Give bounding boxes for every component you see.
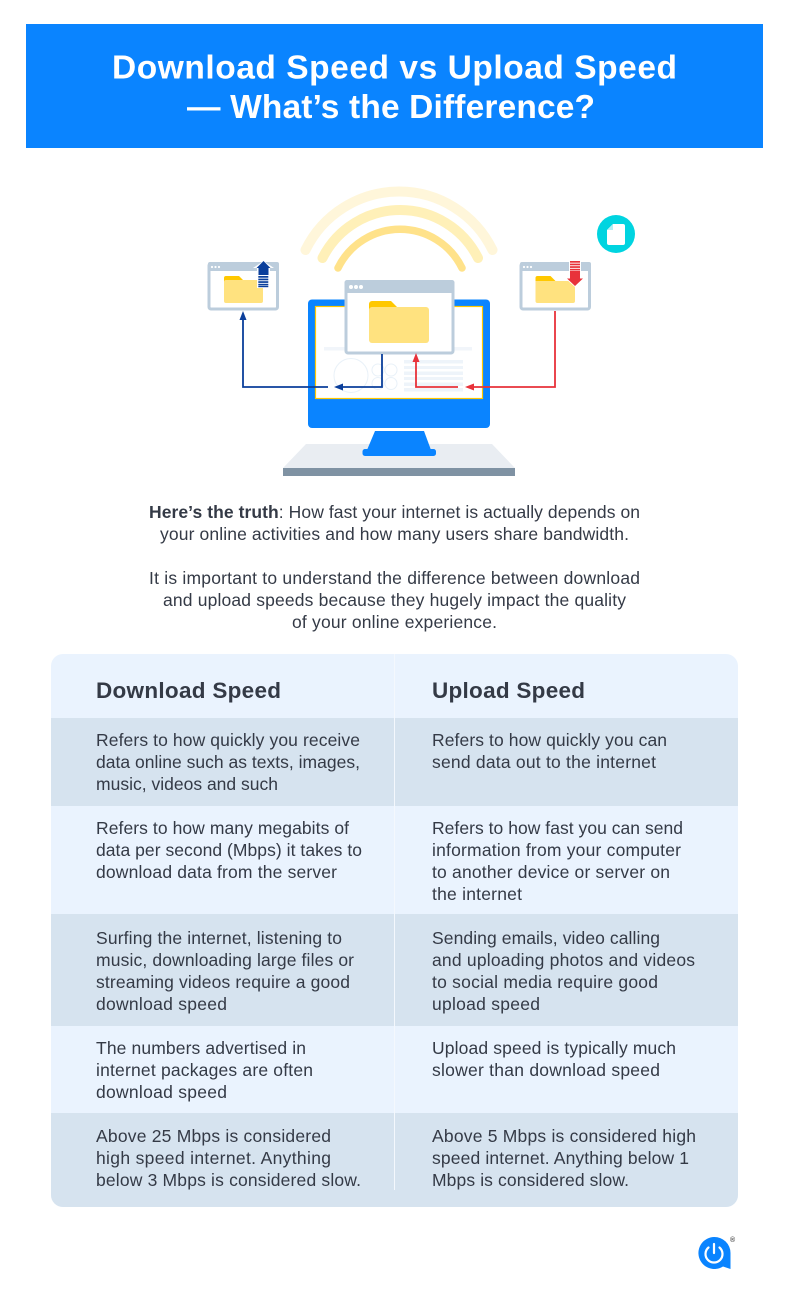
row 4 upload: Upload speed is typically much [432,1038,676,1058]
row 2 upload: to another device or server on [432,862,670,882]
intro text: of your online experience. [292,612,497,632]
row 5 upload: Above 5 Mbps is considered high [432,1126,696,1146]
row 3 upload: to social media require good [432,972,658,992]
icon: cyan document badge [597,215,635,253]
row 3 download: download speed [96,994,227,1014]
row 2 upload: the internet [432,884,522,904]
intro text [149,502,640,632]
table header: download speed: Download Speed [96,678,281,703]
logo: ® [730,1236,736,1244]
row 1 download: music, videos and such [96,774,278,794]
row 3 upload: Sending emails, video calling [432,928,660,948]
row 2 download: Refers to how many megabits of [96,818,349,838]
row 5 download: below 3 Mbps is considered slow. [96,1170,361,1190]
arrow: blue upload path [240,311,382,390]
row 4 download: download speed [96,1082,227,1102]
row 1 download: Refers to how quickly you receive [96,730,360,750]
row 2 upload: information from your computer [432,840,681,860]
row 3 upload: upload speed [432,994,540,1014]
row 4 download: internet packages are often [96,1060,313,1080]
row 2 upload: Refers to how fast you can send [432,818,683,838]
icon: desk [283,444,515,476]
row 3 download: streaming videos require a good [96,972,350,992]
row 3 upload: and uploading photos and videos [432,950,695,970]
title banner: — What’s the Difference? [187,89,595,126]
arrow: red download path [412,311,555,390]
comparison table [51,654,738,1207]
icon: right folder window with download arrow [520,261,591,309]
row 2 download: data per second (Mbps) it takes to [96,840,362,860]
row 5 upload: speed internet. Anything below 1 [432,1148,689,1168]
row 3 download: music, downloading large files or [96,950,354,970]
row 4 download [96,1038,313,1102]
row 1 download: data online such as texts, images, [96,752,360,772]
icon: centre folder window [344,280,454,353]
title banner: Download Speed vs Upload Speed [112,50,677,86]
row 3 download: Surfing the internet, listening to [96,928,342,948]
title banner [26,24,763,148]
row 1 download [96,730,360,794]
logo [698,1236,736,1269]
row 3 upload [432,928,695,1014]
table header: upload speed: Upload Speed [432,678,585,703]
illustration: computer with upload and download [208,192,635,476]
row 2 download: download data from the server [96,862,337,882]
row 4 download: The numbers advertised in [96,1038,306,1058]
row 5 upload [432,1126,696,1190]
intro text: your online activities and how many users share bandwidth. [160,524,629,544]
row 1 upload: Refers to how quickly you can [432,730,667,750]
intro text: Here’s the truth: How fast your internet is actually depends on [149,502,640,522]
row 1 upload: send data out to the internet [432,752,656,772]
row 1 upload [432,730,667,772]
row 4 upload: slower than download speed [432,1060,660,1080]
icon: wifi arcs [306,192,492,268]
intro text: It is important to understand the difference between download [149,568,640,588]
table background [51,654,738,1207]
row 2 upload [432,818,683,904]
row 3 download [96,928,354,1014]
row 5 download: Above 25 Mbps is considered [96,1126,331,1146]
row 2 download [96,818,362,882]
row 4 upload [432,1038,676,1080]
intro text: and upload speeds because they hugely impact the quality [163,590,626,610]
icon: monitor [308,300,490,456]
icon: left folder window with upload arrow [208,261,279,309]
row 5 upload: Mbps is considered slow. [432,1170,629,1190]
row 5 download: high speed internet. Anything [96,1148,331,1168]
row 5 download [96,1126,361,1190]
